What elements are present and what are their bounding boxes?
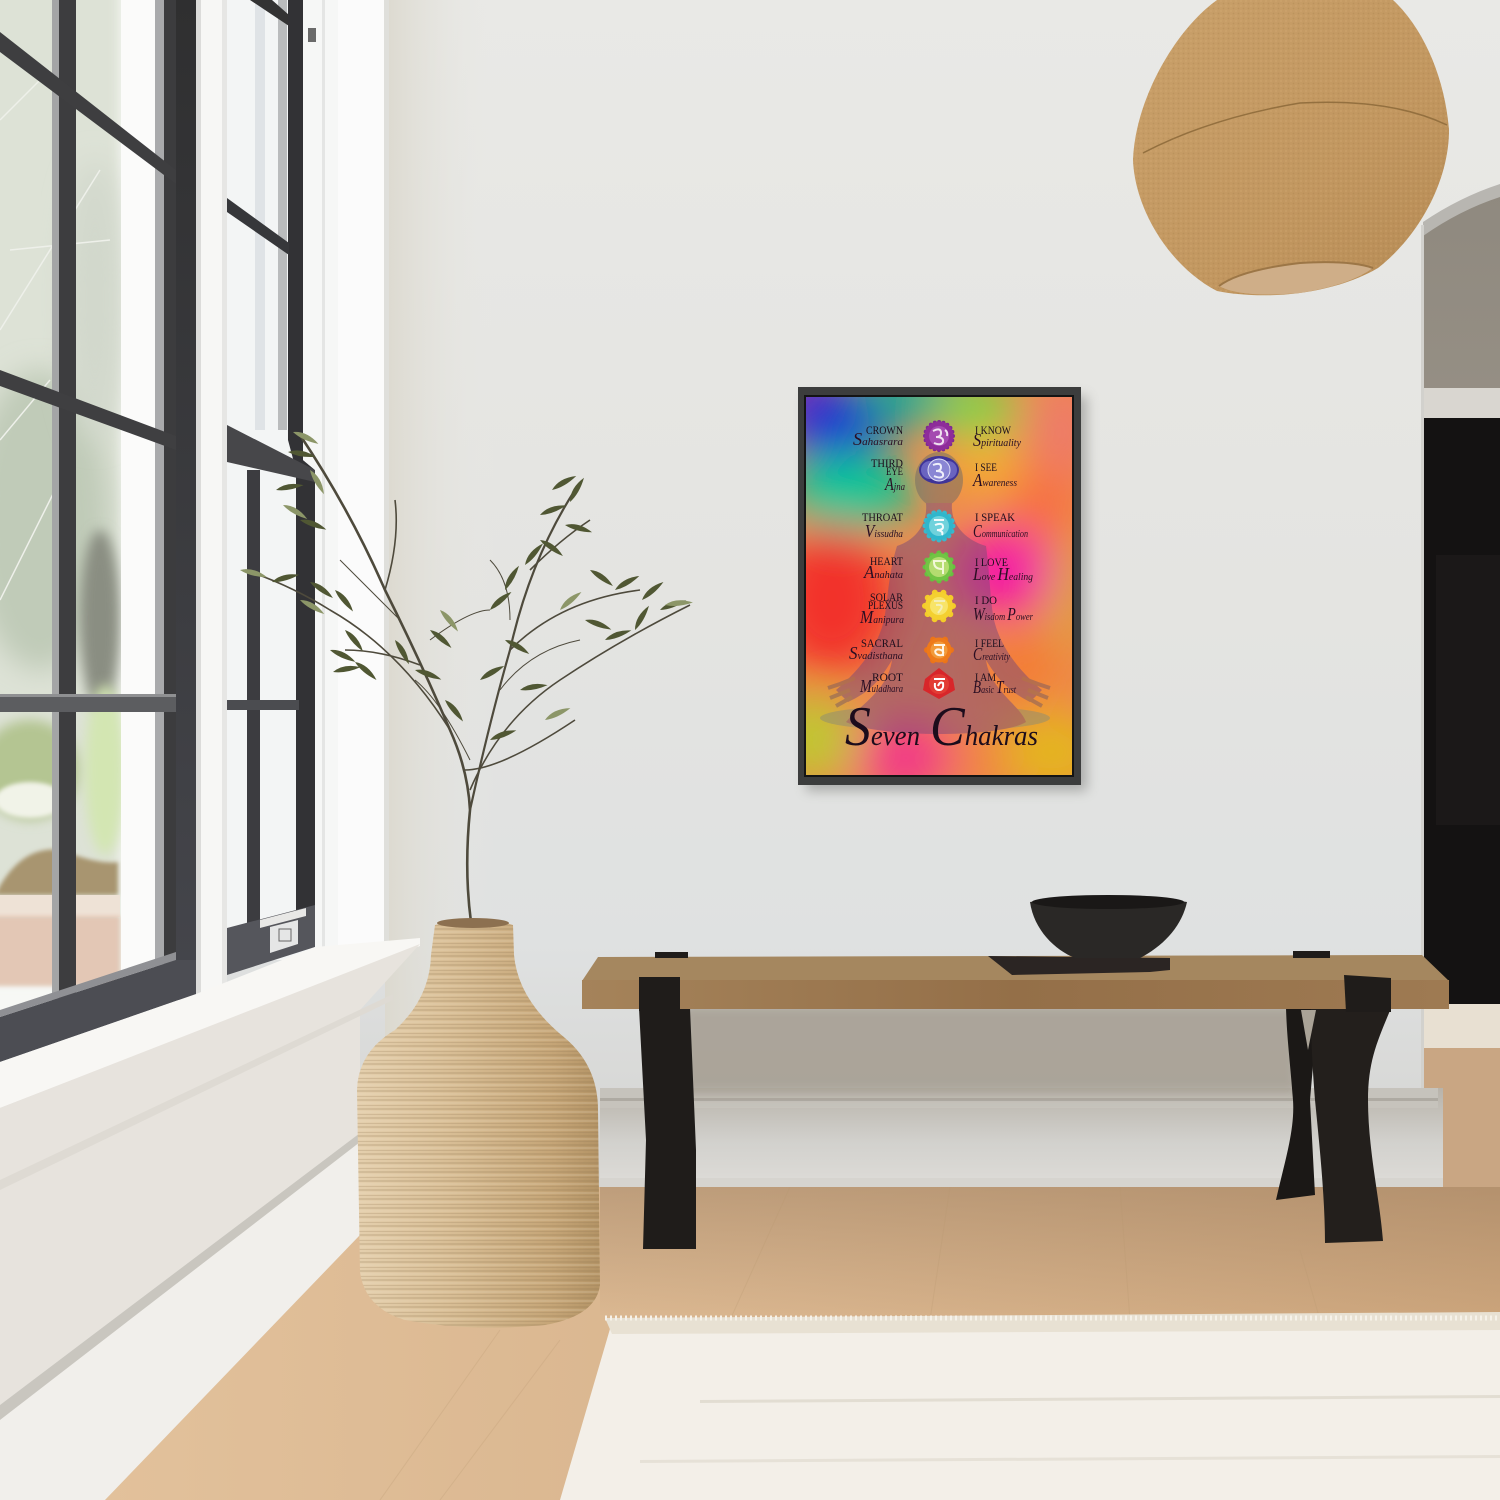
I speak: Communication: [973, 521, 1028, 541]
heart label: Anahata: [863, 562, 903, 582]
I know: I KNOW: [975, 423, 1012, 437]
bench: [582, 895, 1449, 1249]
sacral label: SACRAL: [861, 636, 903, 650]
chakra: sacral: [926, 638, 952, 662]
I know: Spirituality: [973, 430, 1021, 450]
framed poster: [798, 387, 1093, 797]
left leg: [639, 1008, 696, 1249]
I do: Wisdom Power: [973, 604, 1034, 624]
hallway and doorway: [1423, 184, 1500, 1188]
poster gradient background: [806, 397, 1072, 775]
heart label: HEART: [870, 554, 904, 568]
chakra: solar plexus: [925, 592, 953, 620]
throat label: [862, 510, 904, 541]
window sill and lower wall: [0, 938, 420, 1500]
tray: [988, 956, 1170, 975]
I do: [973, 593, 1034, 624]
crown label: Sahasrara: [853, 429, 904, 449]
plant branches: [245, 435, 690, 922]
chakra: heart: [925, 553, 953, 581]
I am: Basic Trust: [973, 677, 1017, 697]
I am: I AM: [975, 670, 996, 684]
poster title: Chakras: [930, 696, 1038, 758]
poster title: Seven: [845, 696, 920, 758]
wall right edge: [1421, 225, 1424, 1090]
baseboard: [600, 1088, 1443, 1187]
bench front: [582, 980, 1449, 1009]
meditating figure silhouette: [820, 452, 1050, 734]
third eye label: EYE: [886, 464, 903, 478]
dark door: [1424, 418, 1500, 1004]
I love: [972, 555, 1033, 584]
root label: ROOT: [872, 670, 904, 684]
right column labels: [972, 423, 1034, 697]
shadow under bench: [680, 1003, 1300, 1095]
poster title: [845, 696, 1038, 758]
I love: Love Healing: [972, 564, 1033, 584]
cream rug: [560, 1312, 1500, 1500]
left window sash: [0, 0, 196, 1062]
I see: I SEE: [975, 460, 997, 474]
wall outlet: [270, 920, 298, 953]
I do: I DO: [975, 593, 997, 607]
window jamb: [303, 0, 389, 950]
plant leaves: [239, 429, 693, 742]
frame shadow: [806, 396, 1087, 791]
I feel: I FEEL: [975, 636, 1004, 650]
solar plexus label: PLEXUS: [868, 598, 903, 612]
chakra: root: [923, 668, 955, 699]
root label: [859, 670, 904, 696]
I love: I LOVE: [975, 555, 1008, 569]
bench top: [582, 955, 1449, 981]
chakra: crown: [924, 422, 954, 450]
chakra: third eye: [919, 456, 959, 484]
root label: Muladhara: [859, 676, 903, 696]
black bowl: [1030, 895, 1187, 958]
I speak: [973, 510, 1028, 541]
solar plexus label: Manipura: [859, 607, 904, 627]
metal straps: [639, 951, 1391, 1012]
wood floor: [105, 1187, 1500, 1500]
I feel: Creativity: [973, 644, 1010, 664]
third eye label: THIRD: [871, 456, 903, 470]
I see: Awareness: [972, 470, 1017, 490]
solar plexus label: [859, 590, 904, 627]
window centre column: [196, 0, 227, 1000]
frame: [798, 387, 1081, 785]
heart label: [863, 554, 904, 582]
right window sash: [227, 0, 315, 975]
plant in vase: [239, 429, 693, 1328]
I speak: I SPEAK: [975, 510, 1015, 524]
I see: [972, 460, 1017, 490]
chakra: throat: [925, 512, 953, 540]
sacral label: Svadisthana: [849, 643, 903, 663]
third eye label: Ajna: [884, 474, 905, 494]
right leg: [1276, 1008, 1391, 1243]
solar plexus label: SOLAR: [870, 590, 903, 604]
third eye label: [871, 456, 905, 494]
window glass and garden view: [0, 0, 155, 1010]
woven vase: [357, 918, 600, 1328]
left column labels: [849, 423, 905, 696]
I am: [973, 670, 1017, 697]
crown label: CROWN: [866, 423, 903, 437]
pendant lamp: [1133, 0, 1449, 295]
throat label: THROAT: [862, 510, 904, 524]
I know: [973, 423, 1021, 450]
throat label: Vissudha: [865, 521, 903, 541]
I feel: [973, 636, 1010, 664]
